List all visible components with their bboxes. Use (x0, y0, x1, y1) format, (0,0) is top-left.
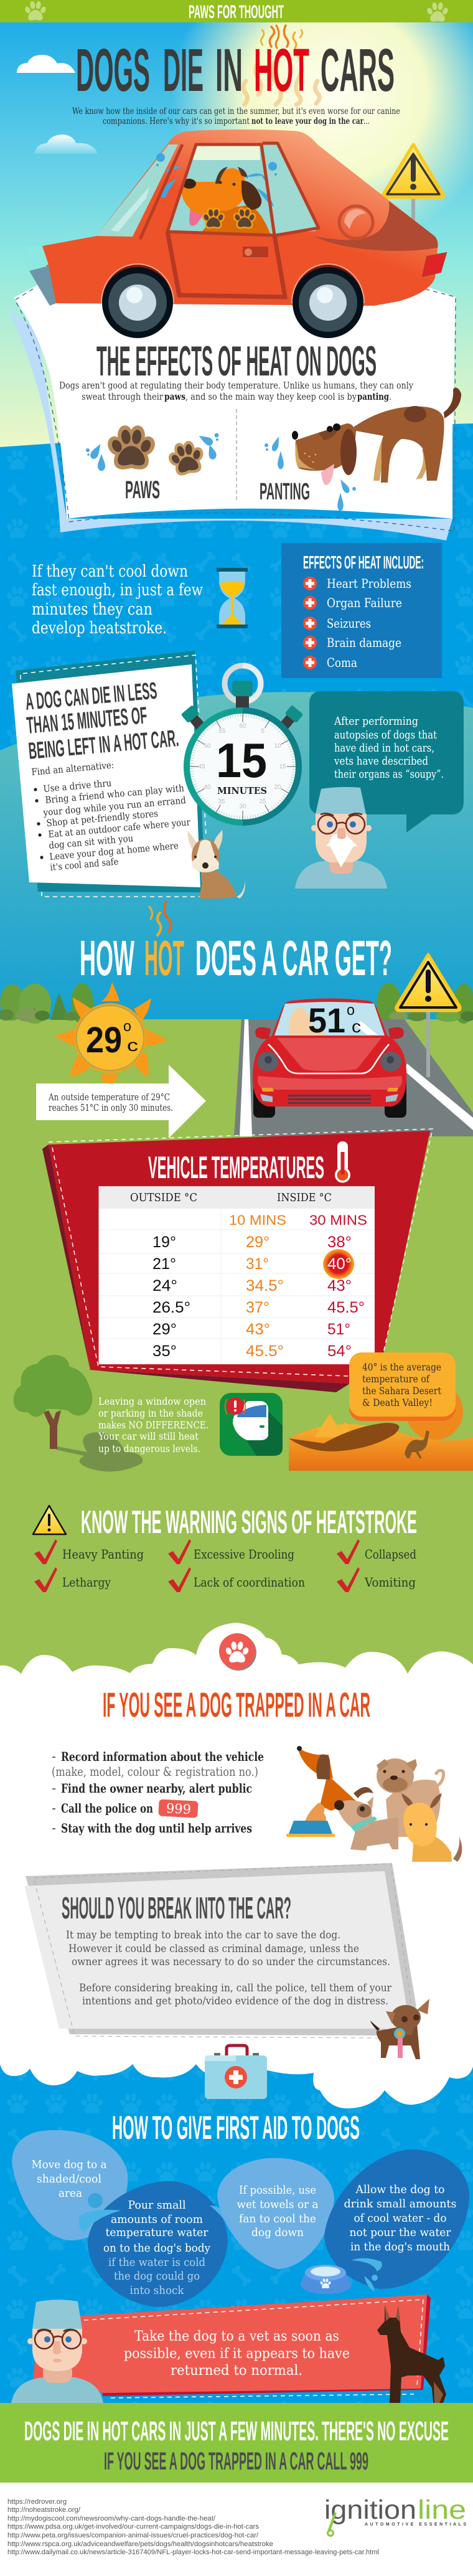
callout: 40 degrees: temperature of (362, 1373, 430, 1385)
item: heart problems: Heart Problems (327, 576, 411, 591)
icon: car door alert (220, 1393, 283, 1456)
icon: right paw (426, 2, 449, 22)
text: window open: makes NO DIFFERENCE. (98, 1419, 208, 1431)
sun glow (171, 0, 473, 249)
card: a dog can die: BEING LEFT IN A HOT CAR. (27, 725, 180, 765)
white section background (0, 1623, 473, 2117)
illustration: panting dog (265, 388, 461, 511)
dial numbers: 35 (218, 798, 225, 805)
10 minute column: 29° (246, 1234, 269, 1251)
card body text: owner agrees it was necessary to do so under the circumstances. (72, 1956, 390, 1968)
list: what to do: Stay with the dog until help arrives (61, 1821, 252, 1836)
30 minute column: 45.5° (327, 1299, 365, 1316)
item: seizures (303, 616, 371, 631)
car temperature: 51 (308, 1001, 345, 1040)
road (234, 1019, 473, 1136)
panel: effects of heat on dogs: PANTING (260, 479, 310, 505)
icon: hourglass (217, 568, 248, 628)
flames above heading (149, 902, 171, 935)
table sub-header: 10 MINS (229, 1212, 286, 1228)
source links: https://redrover.org (7, 2498, 67, 2506)
table header: OUTSIDE °C (130, 1191, 197, 1204)
warning signs checklist: Heavy Panting (62, 1547, 144, 1562)
logo: ignition line: ignition (324, 2495, 416, 2525)
outside column: 21° (152, 1255, 176, 1273)
table sub-header (229, 1212, 367, 1228)
panel intro text: . (389, 391, 391, 402)
dial numbers: 40 (204, 784, 211, 791)
side window (167, 144, 317, 234)
10 minute column: 37° (246, 1299, 269, 1316)
source links: http://www.rspca.org.uk/adviceandwelfare/pets/dogs/health/dogsinhotcars/heatstroke (7, 2541, 273, 2548)
list: what to do: Find the owner nearby, alert public (61, 1781, 252, 1796)
blob: pour water: temperature water (106, 2226, 208, 2239)
outside column: 29° (152, 1321, 177, 1338)
source links: http://noheatstroke.org/ (7, 2506, 81, 2514)
list: what to do: Call the police on (61, 1801, 153, 1816)
callout: 40 degrees: the Sahara Desert (362, 1385, 441, 1397)
logo: ignition line: line (418, 2495, 466, 2525)
icon: left paw (24, 1, 47, 21)
speech bubble: autopsies of dogs that (334, 729, 438, 742)
blob: pour water: the dog could go (114, 2270, 200, 2283)
header banner (0, 0, 473, 22)
main title: DOGS (76, 36, 150, 104)
speech bubble: have died in hot cars, (334, 742, 434, 755)
outside column (152, 1234, 190, 1360)
dial numbers: 20 (274, 784, 281, 791)
badge: 999: 999 (166, 1801, 192, 1817)
warning signs checklist: Collapsed (365, 1547, 416, 1562)
item: heart problems (303, 576, 411, 591)
blob: pour water: amounts of room (111, 2213, 203, 2226)
panel: effects of heat on dogs: PAWS (125, 476, 160, 504)
pale heat waves behind HOT (243, 56, 319, 105)
warning signs checklist: Lack of coordination (194, 1575, 305, 1590)
blob: move dog (12, 2130, 128, 2240)
item: brain damage (303, 635, 401, 650)
illustration: small puppy (188, 830, 245, 899)
panel intro text (59, 380, 413, 402)
dial numbers: 10 (274, 743, 281, 750)
intro text: companions. Here's why it's so important (103, 116, 250, 126)
footer background (0, 2483, 473, 2576)
front wheel (101, 264, 174, 338)
fuel cap (339, 206, 373, 238)
illustration: vet two (11, 2300, 103, 2403)
dial numbers: 60 (239, 723, 246, 730)
warning signs checklist (34, 1539, 416, 1592)
dial numbers: 50 (204, 743, 211, 750)
table (98, 1186, 375, 1364)
item: organ failure: Organ Failure (327, 595, 402, 610)
30 minute column: 38° (327, 1234, 352, 1251)
blob: wet towels: dog down (251, 2226, 304, 2239)
item: seizures: Seizures (327, 616, 371, 631)
dial numbers: 15 (279, 763, 286, 770)
text: window open (98, 1395, 208, 1455)
card body text: Before considering breaking in, call the police, tell them of your (79, 1982, 392, 1994)
illustration: red car with dog (26, 130, 446, 338)
dial numbers: 5 (261, 728, 265, 735)
statement: cool down text: If they can't cool down (32, 562, 188, 581)
card bullets (34, 788, 44, 859)
card text: Leave your dog at home where (49, 840, 179, 862)
water splash (79, 2193, 228, 2232)
statement: cool down text: minutes they can (32, 600, 152, 619)
card body text: intentions and get photo/video evidence of the dog in distress. (82, 1995, 388, 2007)
icon: paw prints (86, 428, 219, 475)
item: coma (303, 655, 357, 670)
warning sign (383, 144, 443, 221)
main title: HOT (254, 36, 309, 104)
rear wheel (292, 264, 364, 338)
illustration: desert (289, 1383, 473, 1471)
table header (130, 1191, 332, 1204)
badge: 999 (158, 1799, 199, 1818)
card heading: THAN 15 MINUTES OF (26, 702, 148, 739)
highlight 40 degrees (323, 1249, 354, 1279)
main title: DIE (163, 36, 204, 104)
card text: Shop at pet-friendly stores (46, 808, 159, 829)
blob: move dog: Move dog to a (31, 2158, 107, 2171)
blob: wet towels: If possible, use (239, 2184, 316, 2197)
card text: Bring a friend who can play with (45, 783, 185, 806)
car temperature: c (352, 1017, 361, 1036)
blob: pour water: if the water is cold (108, 2256, 205, 2269)
text: window open: Your car will still heat (98, 1430, 199, 1442)
panel intro text: sweat through their (82, 391, 164, 402)
panel intro text: panting (357, 391, 389, 402)
statement: cool down text: fast enough, in just a few (32, 581, 203, 600)
panel intro text: Dogs aren't good at regulating their body temperature. Unlike us humans, they can only (59, 380, 413, 391)
sun temperature: c (127, 1036, 138, 1055)
intro text (72, 106, 400, 126)
statement: cool down text: develop heatstroke. (32, 619, 167, 638)
30 minute column: 51° (327, 1321, 350, 1338)
callout: 40 degrees: 40° is the average (362, 1361, 441, 1373)
panel intro text: , and so the main way they keep cool is by (185, 391, 357, 402)
cloud left (17, 55, 75, 73)
green call-to-action bar (0, 2403, 473, 2483)
arrow with caption (36, 1065, 206, 1138)
panel: vehicle temperatures (42, 1129, 433, 1392)
30 minute column: 54° (327, 1342, 352, 1360)
source links: http://www.dailymail.co.uk/news/article-3167409/NFL-player-locks-hot-car-send-important-message-leaving-pets-car.html (7, 2549, 379, 2556)
main title: IN (215, 36, 243, 104)
dial numbers: 30 (239, 803, 246, 810)
icon: water bowl (300, 2258, 382, 2294)
source links: http://www.peta.org/issues/companion-animal-issues/cruel-practices/dog-hot-car/ (7, 2532, 259, 2539)
blue first aid section background (0, 2064, 473, 2404)
table sub-header: 30 MINS (309, 1212, 367, 1228)
illustration: trees left (0, 983, 93, 1024)
heading: how hot does a car get (80, 930, 392, 986)
blob: pour water: into shock (129, 2284, 185, 2297)
card body text: However it could be classed as criminal damage, unless the (68, 1943, 359, 1955)
blob: drink water: Allow the dog to (355, 2183, 444, 2196)
panel: effects of heat on dogs (7, 285, 461, 540)
header banner: PAWS FOR THOUGHT (189, 2, 284, 22)
arrow with caption: reaches 51°C in only 30 minutes. (49, 1102, 173, 1113)
door handle (243, 247, 268, 257)
icon: paw badge (219, 1633, 256, 1671)
10 minute column: 31° (246, 1255, 269, 1273)
statement: cool down text (32, 562, 203, 638)
yellow dog (403, 1803, 462, 1862)
main title (76, 36, 395, 104)
table header: INSIDE °C (277, 1191, 332, 1204)
list: what to do: (make, model, colour & registration no.) (52, 1764, 258, 1779)
list: what to do (52, 1749, 264, 1836)
list: what to do: Record information about the vehicle (61, 1749, 264, 1764)
dial numbers: 55 (218, 728, 226, 735)
card text: Find an alternative: (31, 759, 115, 778)
card text: Eat at an outdoor cafe where your (48, 816, 191, 840)
dial numbers: 25 (259, 798, 266, 805)
flames above title (261, 26, 302, 48)
30 minute column (327, 1234, 365, 1360)
text: window open: or parking in the shade (98, 1407, 203, 1419)
outside column: 26.5° (152, 1299, 190, 1316)
item: brain damage: Brain damage (327, 635, 401, 650)
window frame (140, 143, 319, 239)
card text: dog can sit with you (49, 833, 134, 851)
icon: thermometer (335, 1141, 350, 1183)
sweat drops (156, 153, 277, 207)
outside column: 35° (152, 1342, 177, 1360)
outside column: 19° (152, 1234, 176, 1251)
card body text (66, 1929, 392, 2007)
blue patterned section background (0, 423, 473, 809)
card heading (24, 678, 180, 765)
sun temperature: o (123, 1018, 131, 1035)
callout: 40 degrees (349, 1352, 456, 1421)
blob: pour water (88, 2181, 228, 2307)
text: window open: Leaving a window open (98, 1395, 206, 1407)
item: coma: Coma (327, 655, 357, 670)
panel intro text: paws (164, 391, 185, 402)
blob: pour water: Pour small (128, 2199, 186, 2212)
warning sign on road (396, 955, 460, 1077)
orange dog (297, 1746, 373, 1811)
speech bubble (309, 691, 464, 833)
card text (31, 759, 191, 873)
warning signs checklist: Excessive Drooling (194, 1547, 294, 1562)
banner: take dog to vet (33, 2295, 431, 2398)
source links: http://mydogiscool.com/newsroom/why-cant-dogs-handle-the-heat/ (7, 2515, 216, 2522)
blob: drink water: not pour the water (350, 2226, 451, 2239)
stopwatch unit: MINUTES (217, 785, 267, 796)
intro text: ... (363, 116, 370, 126)
warning signs checklist: Vomiting (364, 1575, 416, 1590)
dial numbers (198, 723, 286, 810)
callout: 40 degrees: & Death Valley! (362, 1397, 433, 1408)
outside column: 24° (152, 1277, 177, 1295)
intro text: not to leave your dog in the car (251, 116, 363, 126)
cloud lower (34, 134, 98, 154)
blob: wet towels: fan to cool the (239, 2212, 316, 2225)
dial numbers: 45 (198, 763, 205, 770)
card text: Use a drive thru (43, 777, 112, 795)
item: organ failure (303, 595, 402, 610)
icon: warning triangle (33, 1506, 66, 1534)
blob: drink water: in the dog's mouth (350, 2240, 450, 2253)
warning signs checklist: Lethargy (62, 1575, 111, 1590)
card text: it's cool and safe (50, 856, 119, 873)
dog in window (181, 167, 270, 234)
teal hill background (0, 692, 473, 1027)
speech bubble: vets have described (334, 755, 428, 768)
panel: effects of heat include (281, 543, 442, 678)
rear shading (314, 201, 438, 251)
10 minute column: 34.5° (246, 1277, 284, 1295)
speech bubble: After performing (334, 715, 418, 728)
stopwatch (181, 666, 303, 826)
illustration: group of dogs (286, 1746, 462, 1862)
blob: wet towels: wet towels or a (236, 2198, 319, 2211)
card: a dog can die (12, 651, 206, 897)
heading: how hot does a car get: HOW (80, 930, 134, 986)
illustration: vet (295, 787, 387, 889)
logo: ignition line: AUTOMOTIVE ESSENTIALS (365, 2522, 466, 2527)
door outline (167, 232, 285, 297)
icon: first aid kit (205, 2045, 267, 2099)
blob: wet towels (217, 2158, 334, 2269)
blob: pour water: on to the dog's body (103, 2242, 211, 2255)
blob: drink water: of cool water - do (354, 2212, 447, 2225)
illustration: car front (253, 999, 406, 1118)
banner: take dog to vet: returned to normal. (171, 2363, 302, 2379)
front bumper (29, 266, 56, 306)
pug (377, 1758, 443, 1837)
banner: take dog to vet: possible, even if it appears to have (124, 2346, 350, 2362)
blob: drink water: drink small amounts (344, 2197, 457, 2210)
heading: how hot does a car get: HOT (144, 930, 184, 986)
tail light (423, 253, 446, 276)
speech bubble: their organs as “soupy”. (334, 768, 444, 781)
banner: take dog to vet: Take the dog to a vet as soon as (134, 2329, 339, 2344)
arrow with caption: An outside temperature of 29°C (48, 1092, 170, 1103)
logo: ignition line (324, 2495, 466, 2536)
30 minute column: 43° (327, 1277, 352, 1295)
car temperature: o (347, 1002, 355, 1019)
illustration: trees right (377, 983, 473, 1024)
illustration: doberman (377, 2305, 446, 2403)
sky background (0, 22, 473, 458)
illustration: small dog with rosette (370, 1999, 429, 2059)
blob: move dog: area (59, 2187, 82, 2200)
illustration: tree and shadow (14, 1355, 143, 1471)
windshield (96, 144, 178, 237)
front headlight (26, 246, 49, 270)
green ground background (0, 1019, 473, 1686)
30 minute column: 40° (327, 1255, 352, 1273)
blob: move dog: shaded/cool (37, 2173, 101, 2186)
stopwatch number: 15 (216, 733, 267, 788)
text: window open: up to dangerous levels. (98, 1443, 200, 1455)
illustration: sun (54, 982, 167, 1094)
10 minute column: 43° (246, 1321, 270, 1338)
card text: your dog while you run an errand (42, 795, 187, 818)
10 minute column: 45.5° (246, 1342, 284, 1360)
card body text: It may be tempting to break into the car to save the dog. (66, 1929, 340, 1941)
sun temperature: 29 (86, 1020, 122, 1060)
card heading: A DOG CAN DIE IN LESS (24, 678, 158, 715)
spotted dog (334, 1796, 398, 1851)
source links (7, 2498, 379, 2556)
blob: drink water (324, 2149, 469, 2289)
source links: https://www.pdsa.org.uk/get-involved/our-current-campaigns/dogs-die-in-hot-cars (7, 2523, 260, 2531)
10 minute column (246, 1234, 284, 1360)
card: should you break into the car (24, 1863, 416, 2038)
food bowl (286, 1803, 335, 1837)
